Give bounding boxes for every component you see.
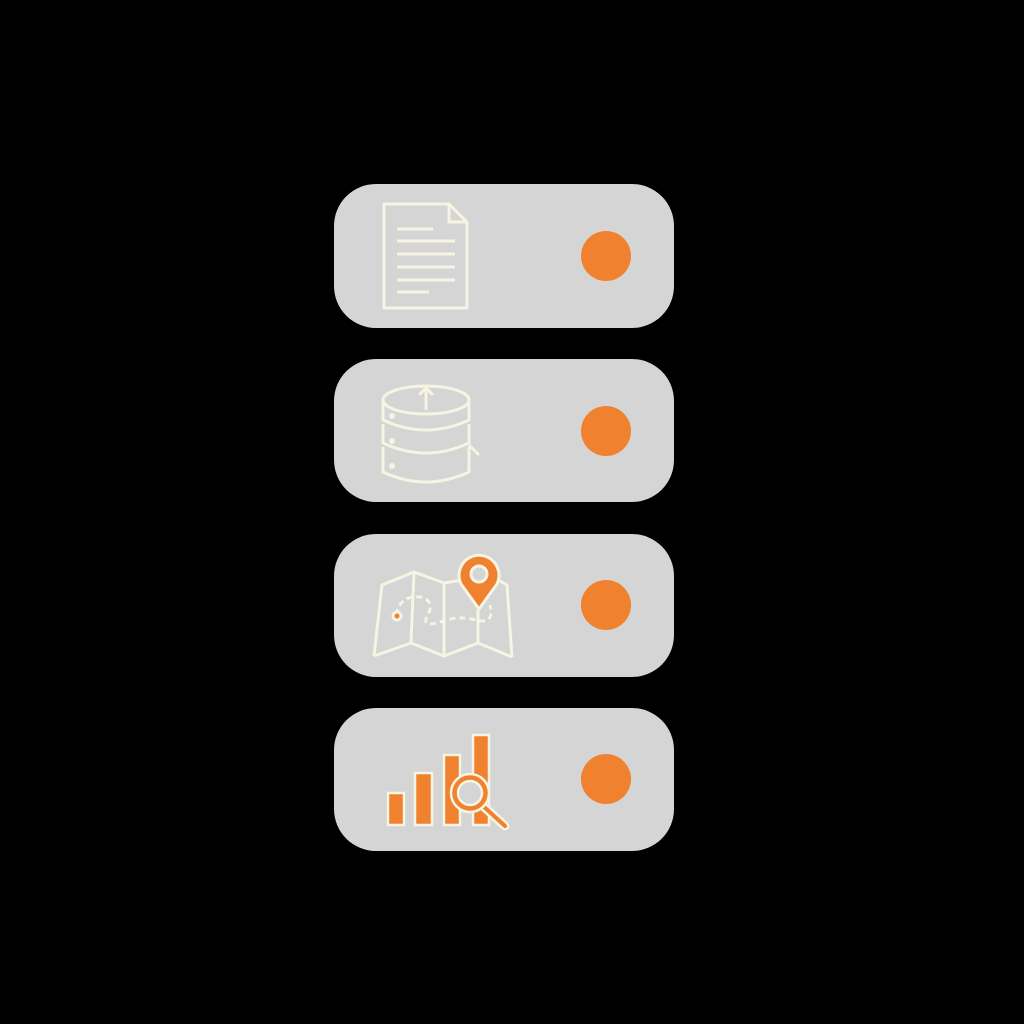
card 2: database bbox=[334, 359, 674, 502]
orange dot 3 bbox=[581, 580, 631, 630]
orange dot 1 bbox=[581, 231, 631, 281]
orange dot 4 bbox=[581, 754, 631, 804]
card 1: document bbox=[334, 184, 674, 328]
icon: bar chart with magnifier bbox=[388, 735, 505, 826]
card 4: chart search bbox=[334, 708, 674, 851]
icon: database upload bbox=[383, 386, 479, 482]
orange dot 2 bbox=[581, 406, 631, 456]
icon: document bbox=[384, 204, 467, 308]
icon: map with pin bbox=[374, 555, 512, 657]
card 3: map bbox=[334, 534, 674, 677]
